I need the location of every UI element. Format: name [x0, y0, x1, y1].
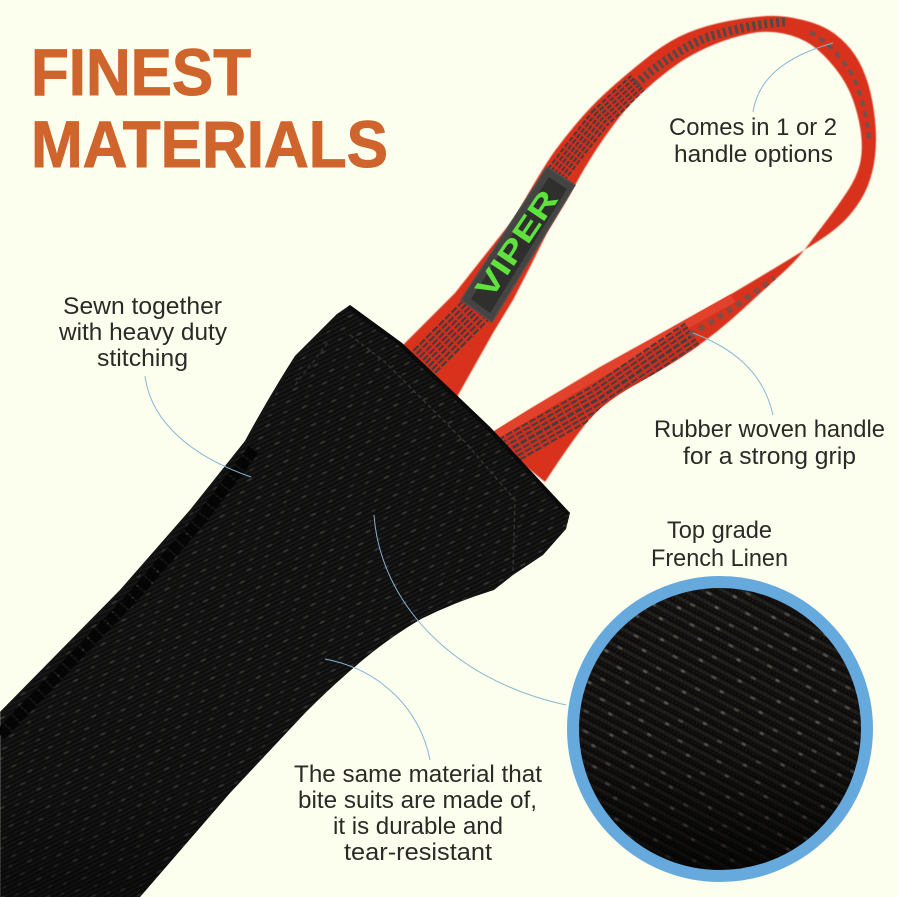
right side stitching — [810, 32, 869, 140]
callout: bite suit material — [294, 761, 542, 866]
callout: stitching: Sewn together — [63, 293, 222, 320]
top of loop stitching — [636, 22, 785, 84]
leader line: handle options — [753, 43, 833, 112]
red woven handle — [400, 16, 876, 482]
callout: bite suit material: The same material that — [294, 761, 542, 788]
leader line: stitching — [145, 376, 251, 477]
leader line: rubber handle — [693, 333, 773, 415]
title — [31, 35, 388, 181]
callout: stitching — [58, 293, 227, 372]
callout: rubber handle — [654, 416, 885, 470]
left strand stitching, below tag — [418, 308, 478, 368]
callout: bite suit material: tear-resistant — [344, 839, 492, 866]
callout: stitching: with heavy duty — [58, 319, 227, 346]
callout: stitching: stitching — [97, 345, 188, 372]
linen tug body — [0, 290, 600, 897]
callout: french linen: Top grade — [667, 517, 772, 544]
leader line: bite suit material — [325, 659, 430, 760]
leader line: french linen — [374, 515, 566, 705]
rope edge seam — [0, 448, 255, 735]
seam stitching — [350, 335, 515, 572]
title: FINEST — [31, 35, 251, 109]
callout: rubber handle: Rubber woven handle — [654, 416, 885, 443]
callout: french linen: French Linen — [651, 545, 788, 572]
callout: rubber handle: for a strong grip — [683, 443, 856, 470]
title: MATERIALS — [31, 107, 388, 181]
lower strand stitching — [505, 335, 693, 452]
linen close-up lens — [570, 580, 870, 880]
left strand stitching, above tag — [556, 83, 638, 175]
callout: handle options: Comes in 1 or 2 — [669, 114, 837, 141]
callout: bite suit material: it is durable and — [333, 813, 503, 840]
callout: handle options: handle options — [674, 141, 833, 168]
brand tag — [461, 167, 575, 322]
brand tag: VIPER — [469, 184, 565, 304]
callout: handle options — [669, 114, 837, 168]
callout: french linen — [651, 517, 788, 572]
callout: bite suit material: bite suits are made of, — [298, 787, 537, 814]
lighter upper edge of lower strand — [490, 298, 733, 438]
